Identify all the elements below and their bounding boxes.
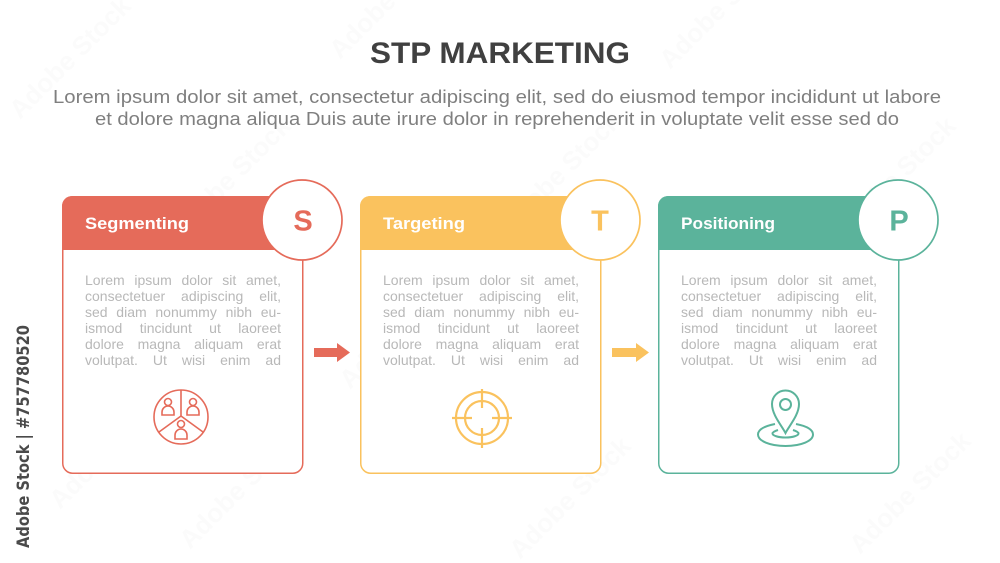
- subtitle text: et dolore magna aliqua Duis aute irure dolor in reprehenderit in voluptate velit esse sed do: [95, 108, 899, 129]
- body text: volutpat. Ut wisi enim ad: [681, 352, 877, 368]
- body text: Lorem ipsum dolor sit amet,: [85, 272, 281, 288]
- icon: target crosshair: [452, 389, 512, 448]
- body text: consectetuer adipiscing elit,: [681, 288, 877, 304]
- subtitle text: [53, 86, 941, 129]
- card outline: [659, 197, 899, 473]
- text: Adobe Stock: [43, 380, 177, 514]
- body text: sed diam nonummy nibh eu-: [383, 304, 579, 320]
- body text: ismod tincidunt ut laoreet: [383, 320, 579, 336]
- body text: ismod tincidunt ut laoreet: [85, 320, 281, 336]
- body text: [383, 272, 579, 368]
- panel: positioning: [658, 179, 939, 474]
- text: Adobe Stock: [163, 110, 297, 244]
- body text: volutpat. Ut wisi enim ad: [383, 352, 579, 368]
- text: Adobe Stock: [843, 425, 977, 559]
- title: STP MARKETING: [370, 37, 630, 70]
- body text: sed diam nonummy nibh eu-: [85, 304, 281, 320]
- body text: consectetuer adipiscing elit,: [383, 288, 579, 304]
- letter badge: [560, 180, 640, 260]
- text: Adobe Stock: [493, 105, 627, 239]
- letter badge: P: [889, 206, 909, 238]
- body text: sed diam nonummy nibh eu-: [681, 304, 877, 320]
- body text: Lorem ipsum dolor sit amet,: [681, 272, 877, 288]
- text: Adobe Stock: [333, 260, 467, 394]
- body text: dolore magna aliquam erat: [85, 336, 281, 352]
- body text: [85, 272, 281, 368]
- header band: [62, 196, 303, 250]
- letter badge: T: [591, 206, 609, 238]
- letter badge: S: [293, 206, 313, 238]
- body text: [681, 272, 877, 368]
- body text: dolore magna aliquam erat: [681, 336, 877, 352]
- stock credit text: Adobe Stock | #757780520: [14, 325, 34, 548]
- text: Adobe Stock: [828, 110, 962, 244]
- body text: volutpat. Ut wisi enim ad: [85, 352, 281, 368]
- body text: Lorem ipsum dolor sit amet,: [383, 272, 579, 288]
- panel: segmenting: [62, 179, 343, 474]
- card outline: [63, 197, 303, 473]
- header band: [360, 196, 601, 250]
- letter badge: [858, 180, 938, 260]
- heading: Positioning: [681, 214, 775, 233]
- body text: dolore magna aliquam erat: [383, 336, 579, 352]
- body text: consectetuer adipiscing elit,: [85, 288, 281, 304]
- icon: segmented people: [154, 390, 208, 444]
- subtitle text: Lorem ipsum dolor sit amet, consectetur adipiscing elit, sed do eiusmod tempor incididunt ut labore: [53, 86, 941, 107]
- text: Adobe Stock: [173, 420, 307, 554]
- body text: ismod tincidunt ut laoreet: [681, 320, 877, 336]
- heading: Segmenting: [85, 214, 189, 233]
- heading: Targeting: [383, 214, 465, 233]
- text: Adobe Stock: [503, 430, 637, 563]
- card outline: [361, 197, 601, 473]
- header band: [658, 196, 899, 250]
- panel: targeting: [360, 179, 641, 474]
- letter badge: [262, 180, 342, 260]
- text: Adobe Stock: [663, 265, 797, 399]
- icon: map pin: [758, 390, 813, 446]
